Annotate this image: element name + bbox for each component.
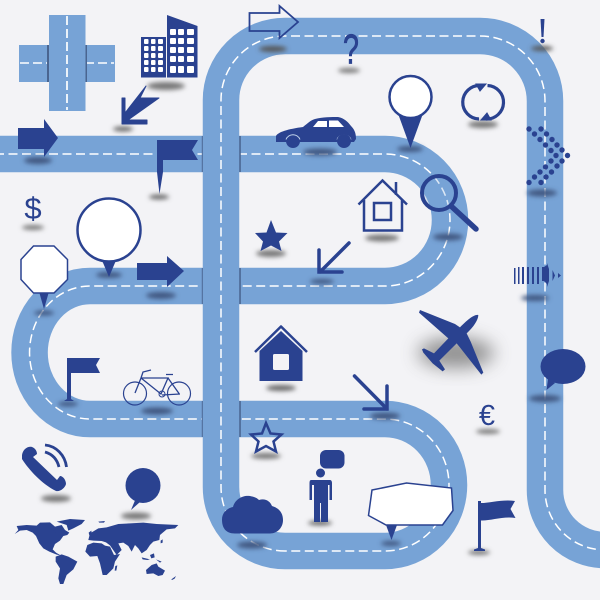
icon: thin arrow down-left [310, 243, 349, 284]
icon: large round pin [78, 198, 140, 278]
Australia [146, 563, 165, 576]
world map [15, 519, 178, 584]
icon: question mark: ? [343, 25, 359, 73]
icon: location pin [390, 76, 432, 152]
icon: octagon pin [21, 246, 68, 316]
icon: outline star [251, 423, 282, 459]
icon: solid star [255, 220, 288, 257]
icon: speech bubble oval [529, 349, 586, 402]
icon: house solid [255, 326, 307, 391]
road: winding horizontal route [0, 154, 450, 551]
icon: arrow down-right [354, 376, 400, 420]
icon: airplane [418, 310, 494, 375]
icon: road crossing [19, 15, 115, 111]
icon: round speech bubble [121, 468, 160, 520]
icon: pole flag [58, 358, 100, 406]
road: long vertical and top route [221, 36, 600, 551]
icon: bicycle [124, 370, 190, 414]
icon: dollar sign: $ [24, 191, 42, 226]
icon: outline arrow right [250, 6, 298, 52]
Africa [85, 543, 120, 575]
icon: euro sign: € [479, 400, 495, 432]
icon: pennant flag on road [149, 140, 198, 200]
icon: house outline [358, 180, 407, 242]
icon: polygon speech bubble [368, 483, 453, 546]
road crossing shadows [202, 136, 241, 437]
icon: waving flag [468, 500, 516, 555]
icon: cloud [222, 496, 283, 548]
icon: person with thought bubble [308, 450, 344, 526]
South America [56, 554, 77, 584]
icon: car [276, 117, 356, 156]
North America [15, 522, 69, 555]
icon: dotted chevron arrow [526, 126, 570, 196]
icon: telephone [22, 445, 71, 502]
icon: refresh arrows [463, 84, 504, 128]
Eurasia [88, 523, 178, 555]
icon: striped arrow right [514, 263, 561, 301]
icon: exclamation mark [531, 19, 553, 51]
icon: magnifying glass [422, 176, 476, 240]
islands [53, 521, 176, 580]
icon: solid arrow right on road [18, 119, 58, 164]
icon: notched arrow down-left [113, 86, 159, 132]
icon: euro sign [476, 400, 500, 434]
icon: solid arrow right on lower road [137, 256, 184, 299]
Greenland [57, 519, 85, 531]
icon: buildings [141, 15, 198, 90]
